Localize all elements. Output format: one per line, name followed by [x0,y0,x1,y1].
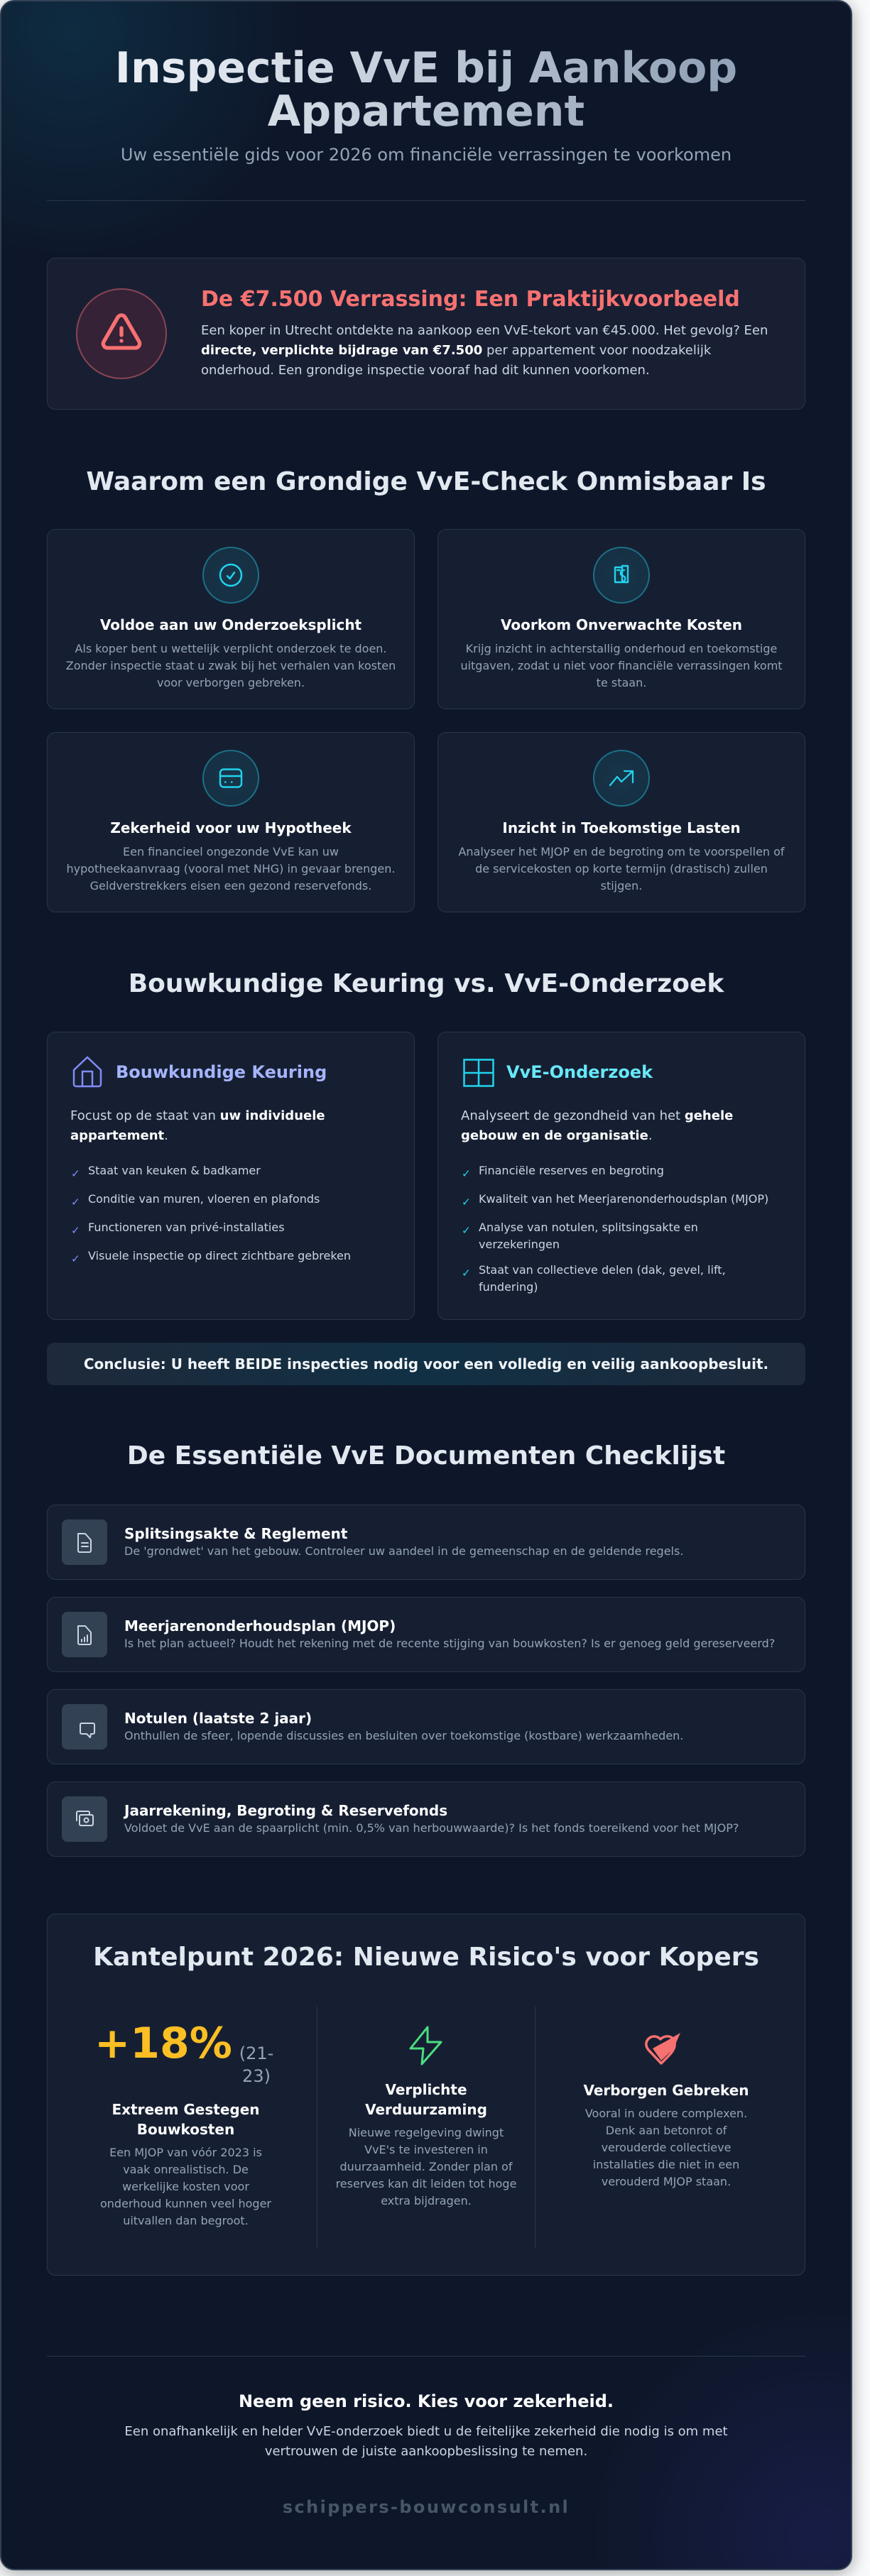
column text: installaties die niet in een [593,2158,739,2171]
checklist: ✓ [71,1167,80,1180]
checklist: Staat van keuken & badkamer [88,1164,261,1177]
footer text [124,2424,728,2459]
checklist: Functioneren van privé-installaties [88,1221,285,1234]
card text: Zonder inspectie staat u zwak bij het verhalen van kosten [66,659,396,672]
title: Inspectie VvE bij Aankoop [115,43,737,93]
card text: uitgaven, zodat u niet voor financiële verrassingen komt [460,659,783,672]
card text [458,845,785,893]
panel: vve onderzoek [437,1032,805,1320]
checklist: ✓ [71,1252,80,1265]
document text: Voldoet de VvE aan de spaarplicht (min. 0,5% van herbouwwaarde)? Is het fonds toereikend voor het MJOP? [124,1821,739,1835]
icon: warning triangle [76,288,167,379]
icon: window grid [463,1059,494,1087]
alert text: directe, verplichte bijdrage van €7.500 per appartement voor noodzakelijk [201,343,711,358]
checklist: Visuele inspectie op direct zichtbare gebreken [88,1249,351,1262]
column text [100,2146,271,2227]
checklist: Kwaliteit van het Meerjarenonderhoudsplan (MJOP) [479,1192,768,1206]
column text: verouderde collectieve [602,2141,731,2154]
alert text: onderhoud. Een grondige inspectie vooraf had dit kunnen voorkomen. [201,363,650,378]
checklist: fundering) [479,1280,538,1294]
card text [66,642,396,689]
title [47,47,805,133]
icon: check circle [202,547,259,604]
panel: hypotheek [47,732,415,912]
checklist: ✓ [462,1167,471,1180]
card text: Als koper bent u wettelijk verplicht onderzoek te doen. [75,642,387,655]
checklist: verzekeringen [479,1238,560,1251]
column heading: Bouwkosten [137,2121,234,2138]
heading: VvE-Onderzoek [506,1062,653,1082]
panel: mjop [47,1597,805,1672]
card title: Voldoe aan uw Onderzoeksplicht [100,616,361,633]
subtitle: Uw essentiële gids voor 2026 om financiële verrassingen te voorkomen [121,145,732,165]
icon: trending up [593,750,650,807]
column text: duurzaamheid. Zonder plan of [339,2160,512,2173]
document text: De 'grondwet' van het gebouw. Controleer uw aandeel in de gemeenschap en de geldende regels. [124,1544,683,1558]
panel: praktijkvoorbeeld alert [47,258,805,410]
icon: document with chart [62,1612,107,1657]
stat: +18%: +18% [94,2019,232,2068]
document title: Meerjarenonderhoudsplan (MJOP) [124,1617,396,1634]
checklist: Staat van collectieve delen (dak, gevel, lift, [479,1263,726,1277]
column: bouwkosten [94,2019,273,2227]
icon: document [62,1519,107,1565]
alert text [201,323,768,378]
panel: bouwkundige keuring [47,1032,415,1320]
card text: Krijg inzicht in achterstallig onderhoud en toekomstige [466,642,777,655]
checklist: Financiële reserves en begroting [479,1164,664,1177]
panel: toekomstige lasten [437,732,805,912]
column heading: Verduurzaming [365,2101,487,2118]
heading: Kantelpunt 2026: Nieuwe Risico's voor Kopers [93,1943,759,1972]
column text: VvE's te investeren in [364,2143,488,2156]
panel: kantelpunt 2026 [47,1914,805,2276]
stat: +18% [94,2019,273,2086]
title: Appartement [268,87,584,136]
column text: Nieuwe regelgeving dwingt [349,2126,504,2139]
card text [460,642,783,689]
column text: Denk aan betonrot of [606,2124,727,2137]
column text [336,2126,516,2207]
checklist [71,1164,351,1265]
icon: heart with hole [645,2033,680,2065]
heading: waarom: Waarom een Grondige VvE-Check Onmisbaar Is [86,467,766,496]
stat: +18%: 23) [242,2066,271,2086]
heading: vergelijking: Bouwkundige Keuring vs. VvE-Onderzoek [129,969,724,998]
panel: onverwachte kosten [437,529,805,709]
card text: hypotheekaanvraag (vooral met NHG) in gevaar brengen. [66,862,395,875]
document title: Splitsingsakte & Reglement [124,1525,347,1542]
card text: Een financieel ongezonde VvE kan uw [123,845,339,858]
column text: vaak onrealistisch. De [123,2163,249,2176]
column text: onderhoud kunnen veel hoger [100,2197,271,2210]
column text: werkelijke kosten voor [122,2180,249,2193]
card title: Inzicht in Toekomstige Lasten [502,819,741,836]
icon: speech bubble [62,1704,107,1750]
alert heading: De €7.500 Verrassing: Een Praktijkvoorbeeld [201,287,740,312]
card text: de servicekosten op korte termijn (drastisch) zullen [475,862,768,875]
intro text [461,1108,733,1143]
card text: Analyseer het MJOP en de begroting om te voorspellen of [458,845,785,858]
card text [66,845,395,893]
checklist: Conditie van muren, vloeren en plafonds [88,1192,320,1206]
stat: +18%: (21- [239,2043,273,2063]
column text: Vooral in oudere complexen. [585,2107,747,2120]
column text: verouderd MJOP staan. [602,2175,731,2188]
heading: Bouwkundige Keuring [116,1062,327,1082]
document text: Is het plan actueel? Houdt het rekening met de recente stijging van bouwkosten? Is er genoeg geld gereserveerd? [124,1637,775,1650]
document title: Notulen (laatste 2 jaar) [124,1710,312,1727]
callout: conclusie: Conclusie: U heeft BEIDE inspecties nodig voor een volledig en veilig aankoopbesluit. [84,1355,768,1372]
checklist: ✓ [462,1267,471,1279]
checklist [462,1164,768,1294]
checklist: ✓ [462,1196,471,1208]
callout: conclusie [47,1343,805,1385]
icon: banknotes [62,1796,107,1842]
card text: Geldverstrekkers eisen een gezond reservefonds. [90,879,371,893]
card text: voor verborgen gebreken. [157,676,305,689]
icon: lightning [409,2026,442,2065]
checklist: Analyse van notulen, splitsingsakte en [479,1221,698,1234]
intro text: Analyseert de gezondheid van het gehele [461,1108,733,1123]
panel: splitsingsakte [47,1505,805,1580]
icon: credit card [202,750,259,807]
intro text: gebouw en de organisatie. [461,1128,653,1143]
footer text: Een onafhankelijk en helder VvE-onderzoek biedt u de feitelijke zekerheid die nodig is om met [124,2424,728,2439]
footer heading: Neem geen risico. Kies voor zekerheid. [239,2391,614,2411]
panel: notulen [47,1689,805,1764]
panel: onderzoeksplicht [47,529,415,709]
icon: house [72,1057,102,1088]
icon: banknote [593,547,650,604]
card title: Zekerheid voor uw Hypotheek [110,819,352,836]
column heading [365,2081,487,2118]
document title: Jaarrekening, Begroting & Reservefonds [124,1802,447,1819]
alert text: Een koper in Utrecht ontdekte na aankoop een VvE-tekort van €45.000. Het gevolg? Een [201,323,768,338]
column text: extra bijdragen. [381,2194,472,2207]
panel: jaarrekening [47,1781,805,1857]
column text: Een MJOP van vóór 2023 is [109,2146,262,2159]
intro text: appartement. [70,1128,168,1143]
footer text: vertrouwen de juiste aankoopbeslissing te nemen. [265,2444,587,2459]
checklist: ✓ [71,1196,80,1208]
column: verborgen gebreken [583,2033,749,2188]
document text: Onthullen de sfeer, lopende discussies en besluiten over toekomstige (kostbare) werkzaamheden. [124,1729,683,1742]
column heading: Extreem Gestegen [112,2101,260,2118]
website: schippers-bouwconsult.nl [283,2497,570,2517]
checklist: ✓ [71,1224,80,1237]
intro text [70,1108,325,1143]
card text: te staan. [597,676,646,689]
intro text: Focust op de staat van uw individuele [70,1108,325,1123]
column text [585,2107,747,2188]
column text: uitvallen dan begroot. [123,2214,249,2227]
column: verduurzaming [336,2026,516,2207]
checklist: ✓ [462,1224,471,1237]
heading: documenten: De Essentiële VvE Documenten Checklijst [127,1441,725,1470]
column heading: Verplichte [385,2081,467,2098]
card text: stijgen. [601,879,642,893]
column text: reserves kan dit leiden tot hoge [336,2177,516,2190]
card title: Voorkom Onverwachte Kosten [501,616,742,633]
column heading [112,2101,260,2138]
column heading: Verborgen Gebreken [583,2082,749,2099]
